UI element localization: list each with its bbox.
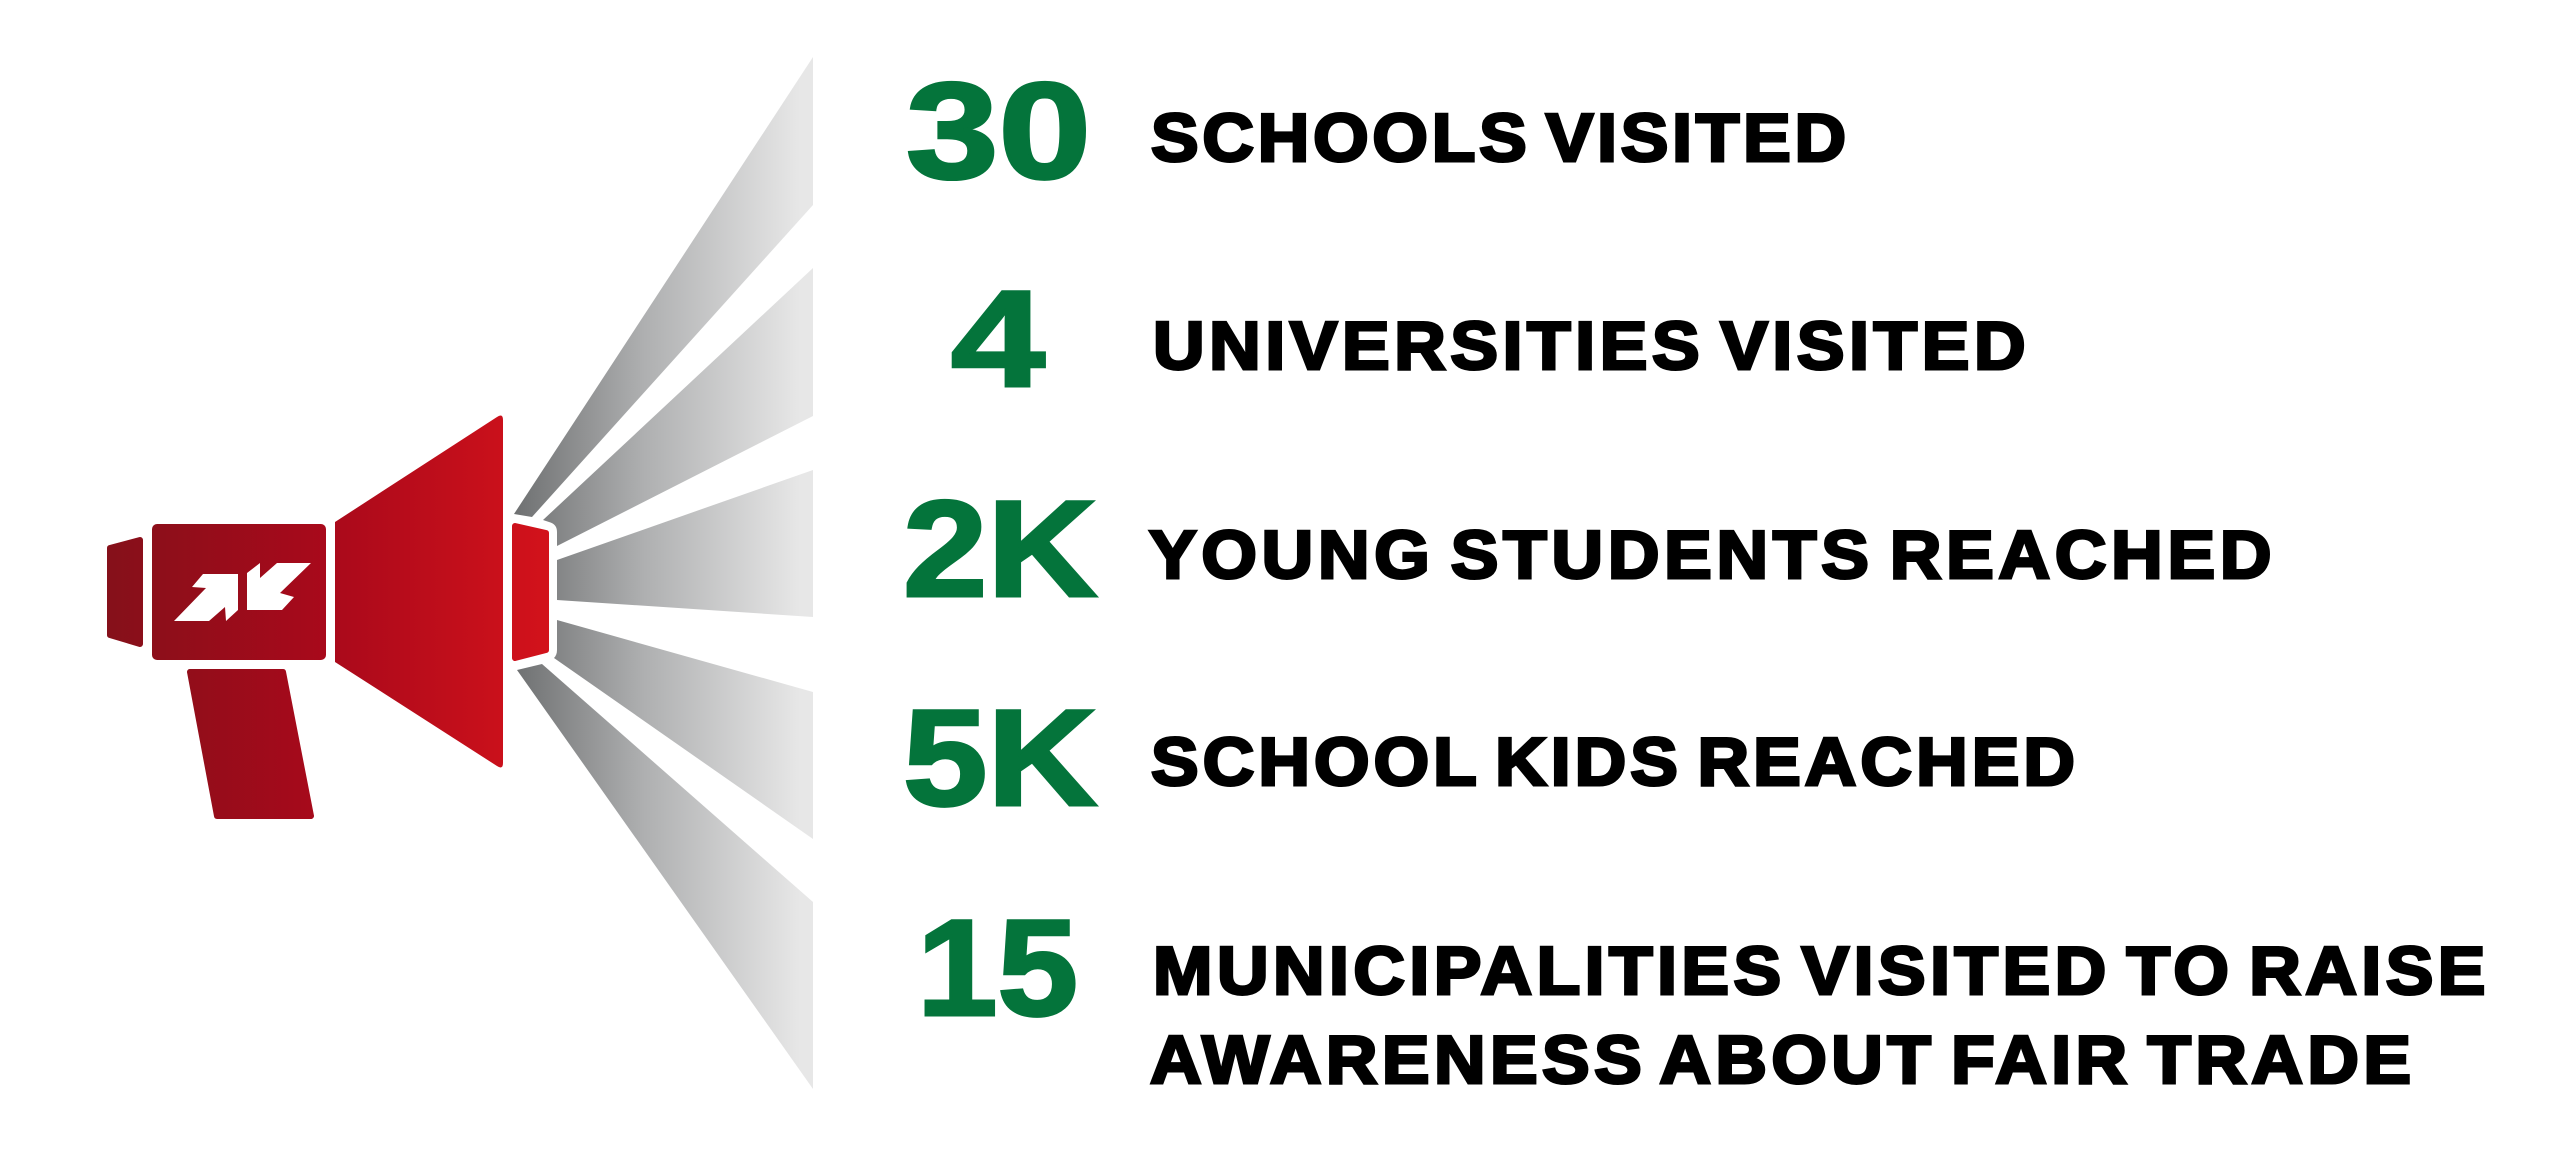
ray 1 — [514, 57, 813, 517]
megaphone handle — [190, 672, 311, 816]
label: school kids reached: SCHOOL KIDS REACHED — [1151, 724, 2075, 800]
sound rays — [514, 57, 813, 1089]
label: universities visited: UNIVERSITIES VISITED — [1153, 308, 2026, 384]
stat row: young students — [903, 473, 2271, 626]
stat row: municipalities — [917, 892, 2485, 1098]
megaphone back cap — [110, 540, 140, 644]
megaphone mouth — [515, 526, 546, 658]
megaphone horn — [335, 416, 503, 767]
icon: white exchange arrows — [174, 563, 311, 621]
number: 30: 30 — [906, 55, 1091, 208]
icon: megaphone — [110, 416, 546, 816]
ray 4 — [554, 620, 813, 839]
ray 3 — [557, 470, 813, 617]
number: 4: 4 — [951, 263, 1045, 416]
stat row: schools — [906, 55, 1846, 208]
label: municipalities visited to raise awareness — [1150, 933, 2485, 1098]
label: municipalities visited to raise awareness: MUNICIPALITIES VISITED TO RAISE — [1153, 933, 2485, 1009]
label: young students reached: YOUNG STUDENTS REACHED — [1149, 517, 2271, 593]
stat row: school kids — [903, 682, 2075, 835]
megaphone body — [152, 524, 326, 660]
number: 15: 15 — [917, 892, 1078, 1045]
stat row: universities — [951, 263, 2026, 416]
label: municipalities visited to raise awareness: AWARENESS ABOUT FAIR TRADE — [1150, 1022, 2411, 1098]
label: schools visited: SCHOOLS VISITED — [1151, 100, 1846, 176]
number: 2K: 2K — [903, 473, 1097, 626]
number: 5K: 5K — [903, 682, 1097, 835]
ray 2 — [543, 268, 813, 546]
ray 5 — [517, 664, 813, 1089]
